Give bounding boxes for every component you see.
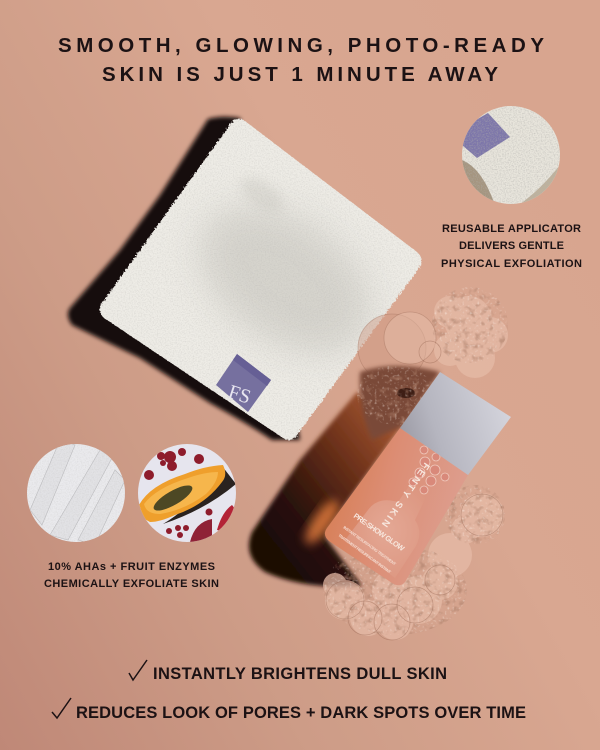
bottle cast shadow [249,392,402,587]
caption: applicator: DELIVERS GENTLE [459,240,564,252]
towel shadow [68,117,300,440]
bottle label text: INSTANT RESURFACING TREATMENT [342,525,398,567]
inner bubbles [409,446,449,494]
caption: AHAs and enzymes: 10% AHAs + FRUIT ENZYMES [48,561,215,573]
reusable applicator towel [90,110,430,450]
foam web texture [320,285,515,645]
bottle cap [400,372,511,475]
towel label: FS [225,381,253,409]
bottle [325,372,511,585]
inner bottle [345,490,416,573]
bottle label text: PRE-SHOW GLOW [352,511,407,554]
icon: check mark [129,660,147,680]
towel label [216,354,271,412]
caption: AHAs and enzymes: CHEMICALLY EXFOLIATE SKIN [44,578,219,590]
bottle body [325,428,468,585]
foam and bubbles [320,285,515,645]
detail circle: towel close-up [462,106,560,205]
caption: AHAs and enzymes [44,561,219,590]
dark foam behind bottle [360,366,440,440]
caption: applicator: PHYSICAL EXFOLIATION [441,258,582,270]
bottle label text [337,460,432,575]
detail circle: papaya and pomegranate [138,444,240,542]
title [58,34,544,86]
title: SMOOTH, GLOWING, PHOTO-READY [58,34,544,57]
bubble outlines [326,341,503,640]
bottle label text: TRAITEMENT RESURFACANT INSTANT [337,533,393,575]
detail circle: gel swatch [27,440,125,545]
pale foam masses [323,296,508,640]
caption: applicator [441,223,582,270]
benefit: pores and dark spots: REDUCES LOOK OF PORES + DARK SPOTS OVER TIME [76,704,526,722]
caption: applicator: REUSABLE APPLICATOR [442,223,581,235]
title: SKIN IS JUST 1 MINUTE AWAY [102,63,498,86]
bottle label text: FENTY SKIN [379,460,432,529]
benefit: brightens: INSTANTLY BRIGHTENS DULL SKIN [153,665,447,683]
icon: check mark [52,698,71,718]
upper clear bubble [358,312,436,382]
